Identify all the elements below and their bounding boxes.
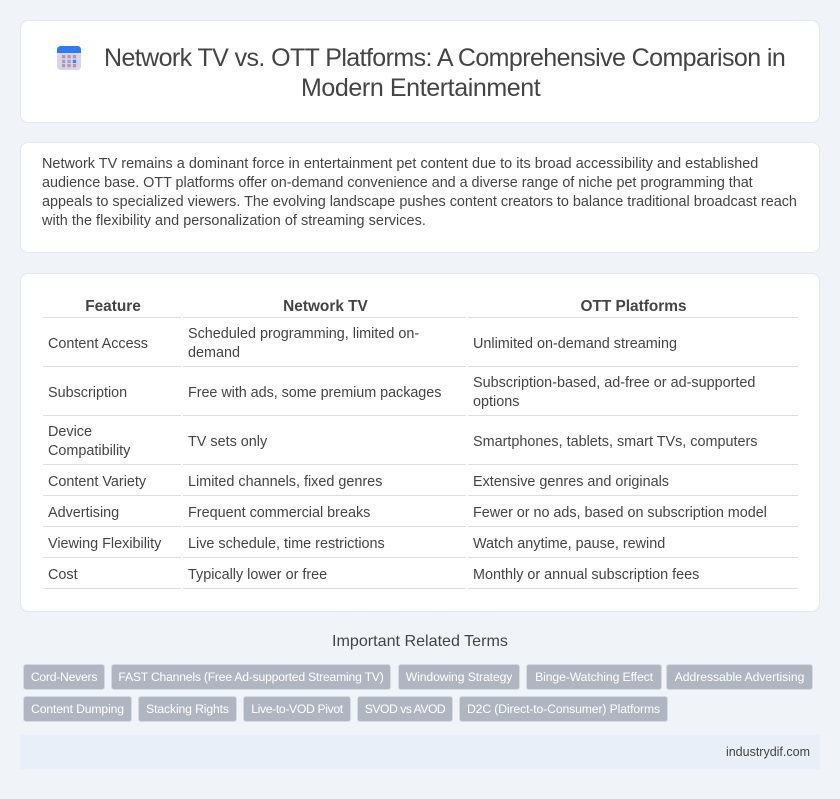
- row: advertising: [48, 505, 767, 521]
- tags: related terms: [23, 664, 813, 722]
- row: content variety: Limited channels, fixed genres: [188, 474, 382, 490]
- footer source text: industrydif.com: [726, 745, 810, 759]
- tag: Addressable Advertising: [675, 670, 804, 684]
- row: subscription: [48, 375, 755, 410]
- tag: [23, 664, 105, 690]
- title: Modern Entertainment: [301, 74, 540, 102]
- tag: [357, 696, 453, 722]
- text block: introduction paragraph: with the flexibility and personalization of streaming services.: [42, 213, 426, 229]
- tag: [459, 696, 668, 722]
- table header: [85, 298, 687, 315]
- row: content variety: [48, 474, 669, 490]
- row: subscription: Subscription-based, ad-free or ad-supported: [473, 375, 755, 391]
- tag: Content Dumping: [31, 702, 124, 716]
- text block: introduction paragraph: Network TV remains a dominant force in entertainment pet content due to its broad accessibility and established: [42, 156, 758, 172]
- tag: [23, 696, 132, 722]
- table header: Network TV: [283, 298, 368, 315]
- row: device compatibility: Compatibility: [48, 443, 130, 459]
- tag: D2C (Direct-to-Consumer) Platforms: [467, 702, 660, 716]
- row: content variety: Extensive genres and originals: [473, 474, 669, 490]
- row: content variety: Content Variety: [48, 474, 146, 490]
- title: Network TV vs. OTT Platforms: A Comprehensive Comparison in: [104, 44, 785, 72]
- row: advertising: Fewer or no ads, based on subscription model: [473, 505, 767, 521]
- text block: introduction paragraph: audience base. OTT platforms offer on-demand convenience and a diverse range of niche pet programming that: [42, 175, 753, 191]
- tag: [398, 664, 520, 690]
- row: viewing flexibility: [48, 536, 665, 552]
- row: cost: Typically lower or free: [188, 567, 327, 583]
- footer: [20, 735, 820, 769]
- row: content access: Content Access: [48, 336, 148, 352]
- tag: [111, 664, 391, 690]
- title: [104, 44, 785, 102]
- row: viewing flexibility: Watch anytime, pause, rewind: [473, 536, 665, 552]
- row: advertising: Advertising: [48, 505, 119, 521]
- tag: FAST Channels (Free Ad-supported Streaming TV): [118, 670, 384, 684]
- icon: calendar: [57, 46, 81, 70]
- text block: introduction paragraph: appeals to specialized viewers. The evolving landscape pushes content creators to balance traditional broadcast reach: [42, 194, 797, 210]
- row: subscription: Subscription: [48, 385, 127, 401]
- row: device compatibility: TV sets only: [188, 434, 267, 450]
- row: viewing flexibility: Viewing Flexibility: [48, 536, 161, 552]
- row: content access: Scheduled programming, limited on-: [188, 326, 419, 342]
- tag: Cord-Nevers: [31, 670, 97, 684]
- heading: important related terms: Important Related Terms: [332, 632, 508, 650]
- row: viewing flexibility: Live schedule, time restrictions: [188, 536, 385, 552]
- row: advertising: Frequent commercial breaks: [188, 505, 370, 521]
- row: content access: Unlimited on-demand streaming: [473, 336, 677, 352]
- row: device compatibility: Device: [48, 424, 92, 440]
- row: subscription: Free with ads, some premium packages: [188, 385, 441, 401]
- row: device compatibility: [48, 424, 757, 459]
- tag: Binge-Watching Effect: [535, 670, 653, 684]
- tag: Windowing Strategy: [406, 670, 512, 684]
- panel: introduction: [20, 142, 820, 253]
- row: cost: [48, 567, 699, 583]
- row: device compatibility: Smartphones, tablets, smart TVs, computers: [473, 434, 757, 450]
- tag: Live-to-VOD Pivot: [251, 702, 343, 716]
- tag: [138, 696, 237, 722]
- panel: comparison table: [20, 273, 820, 612]
- row: content access: demand: [188, 345, 240, 361]
- table header: OTT Platforms: [580, 298, 687, 315]
- row: subscription: options: [473, 394, 519, 410]
- row: content access: [48, 326, 677, 361]
- tag: Stacking Rights: [146, 702, 229, 716]
- tag: SVOD vs AVOD: [365, 702, 445, 716]
- table header: Feature: [85, 298, 141, 315]
- text block: introduction paragraph: [42, 156, 797, 229]
- row: cost: Monthly or annual subscription fees: [473, 567, 699, 583]
- tag: [243, 696, 351, 722]
- row: cost: Cost: [48, 567, 78, 583]
- tag: [666, 664, 813, 690]
- tag: [526, 664, 662, 690]
- panel: title header: [20, 20, 820, 123]
